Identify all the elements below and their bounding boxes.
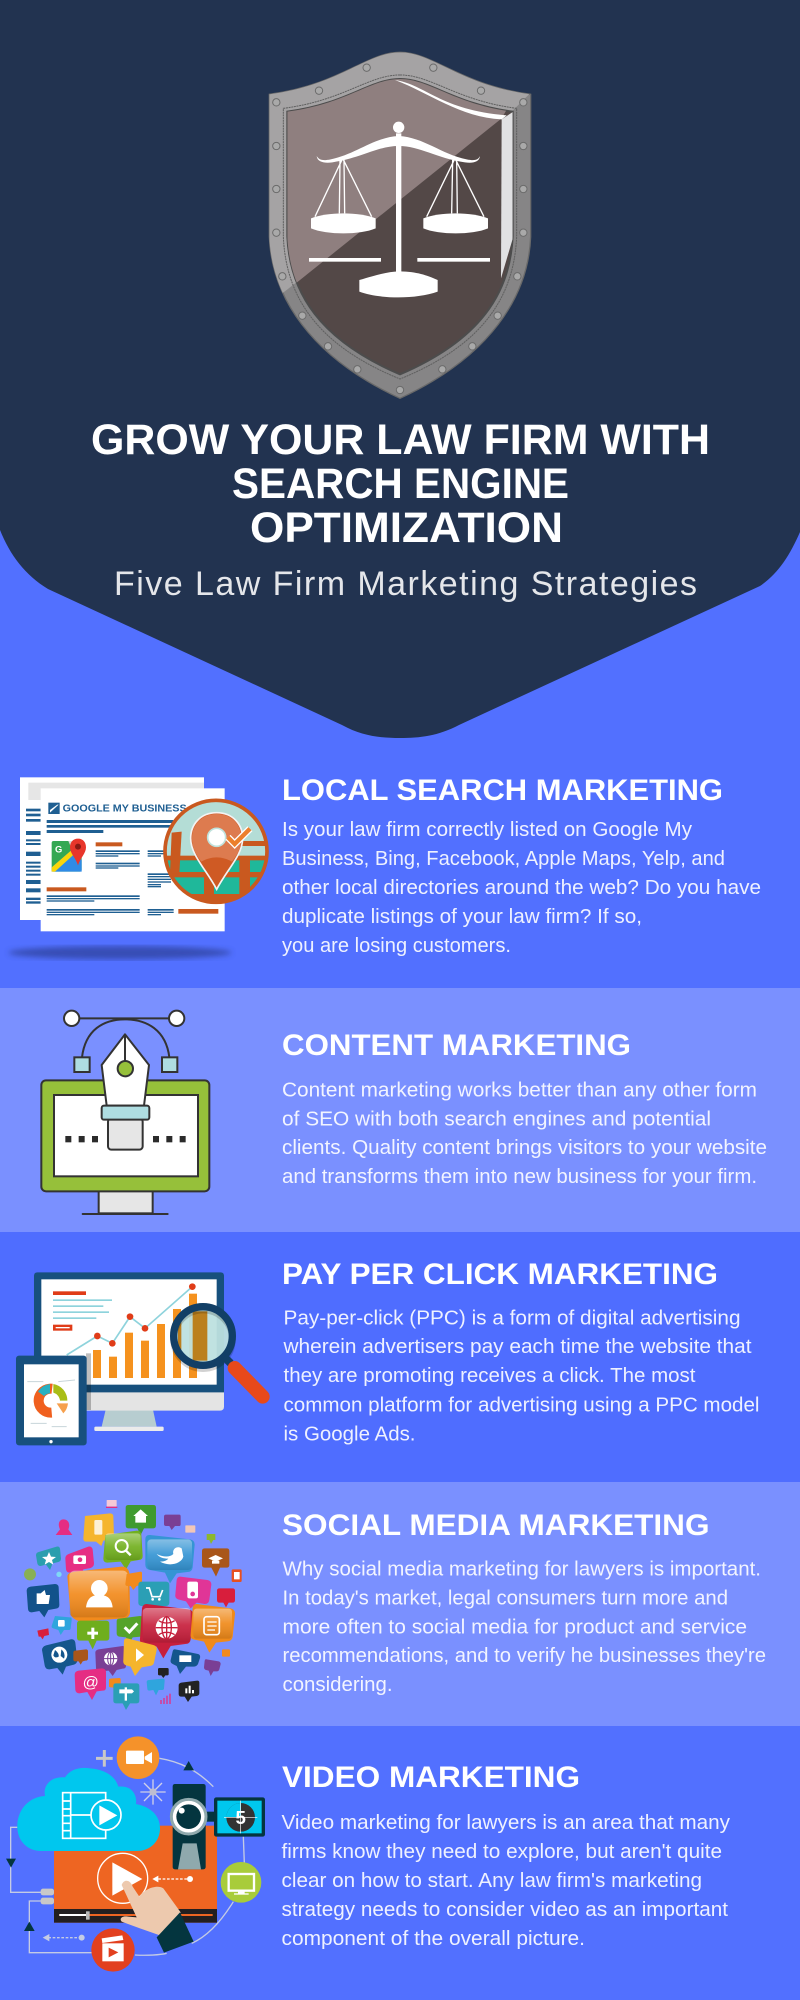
logo mark [48, 803, 60, 814]
text: local search description: other local directories around the web? Do you have [282, 877, 761, 899]
panel: pay per click band [0, 1232, 800, 1482]
panel: video marketing band [0, 1726, 800, 2000]
icon: pen tool on monitor [41, 1011, 209, 1214]
text: local search description: duplicate listings of your law firm? If so, [282, 906, 642, 928]
icon: scales of justice [309, 122, 490, 297]
text: pay per click description: they are promoting receives a click. The most [284, 1365, 696, 1387]
text: social media description [282, 1559, 766, 1696]
text: local search description: you are losing customers. [282, 935, 511, 957]
icon: google maps: G [55, 845, 62, 855]
text: content marketing description: clients. Quality content brings visitors to your website [282, 1137, 767, 1159]
icon: video marketing illustration [6, 1736, 265, 1972]
camera circle [117, 1736, 159, 1779]
title [91, 417, 710, 552]
text: video marketing description: clear on how to start. Any law firm's marketing [282, 1870, 702, 1892]
header panel [0, 0, 800, 738]
text: social media description: In today's market, legal consumers turn more and [282, 1588, 728, 1610]
monitor circle [221, 1862, 261, 1903]
icon: law shield with scales [268, 52, 532, 399]
dashed arrow [158, 1877, 189, 1881]
text: video marketing description: Video marketing for lawyers is an area that many [282, 1812, 730, 1834]
heading: social media marketing: SOCIAL MEDIA MARKETING [282, 1509, 710, 1542]
rivets [273, 64, 527, 394]
icon: social media bubble cluster [24, 1500, 242, 1710]
trend line [67, 1287, 192, 1355]
icon: video marketing illustration: 5 [235, 1807, 246, 1828]
title: OPTIMIZATION [250, 505, 563, 552]
text: content marketing description: of SEO with both search engines and potential [282, 1108, 711, 1130]
text: pay per click description: common platform for advertising using a PPC model [284, 1394, 760, 1416]
icon: social media bubble cluster: @ [83, 1674, 99, 1691]
text: local search description: Is your law firm correctly listed on Google My [282, 819, 692, 841]
text: pay per click description: wherein advertisers pay each time the website that [282, 1336, 752, 1358]
magnifier [174, 1307, 263, 1397]
text: pay per click description [282, 1308, 760, 1446]
title: GROW YOUR LAW FIRM WITH [91, 417, 710, 464]
text: video marketing description: strategy needs to consider video as an important [282, 1899, 728, 1921]
play button [98, 1853, 148, 1903]
icon: map pin badge [163, 800, 273, 907]
text: video marketing description: firms know they need to explore, but aren't quite [282, 1841, 722, 1863]
text: content marketing description: and transforms them into new business for your firm. [282, 1166, 757, 1188]
text: content marketing description: Content marketing works better than any other form [282, 1080, 757, 1102]
text: pay per click description: Pay-per-click (PPC) is a form of digital advertising [284, 1308, 740, 1330]
tablet [16, 1353, 91, 1445]
subtitle: Five Law Firm Marketing Strategies [114, 565, 697, 603]
icon: analytics monitor with magnifier and tablet [16, 1272, 263, 1445]
clapper circle [91, 1928, 135, 1972]
countdown screen [214, 1797, 265, 1837]
panel: content marketing band [0, 988, 800, 1232]
text: video marketing description [282, 1812, 730, 1950]
camera body [173, 1784, 206, 1869]
text: pay per click description: is Google Ads. [284, 1424, 416, 1446]
panel: social media band [0, 1482, 800, 1726]
heading: local search marketing: LOCAL SEARCH MARKETING [282, 774, 723, 807]
heading: content marketing: CONTENT MARKETING [282, 1029, 631, 1062]
text: video marketing description: component of the overall picture. [282, 1928, 585, 1950]
text: local search description: Business, Bing, Facebook, Apple Maps, Yelp, and [282, 848, 725, 870]
connector lines [11, 1758, 244, 1955]
text: social media description: Why social media marketing for lawyers is important. [282, 1559, 761, 1581]
icon: google my business listing [8, 777, 273, 959]
text: local search description [282, 819, 761, 957]
text: social media description: recommendations, and to verify he businesses they're [282, 1645, 766, 1667]
icon: google maps [52, 839, 86, 872]
video player [54, 1826, 217, 1923]
heading: video marketing: VIDEO MARKETING [282, 1761, 580, 1794]
hand [121, 1881, 181, 1937]
bars [93, 1294, 197, 1378]
sun [140, 1779, 166, 1805]
heading: pay per click marketing: PAY PER CLICK MARKETING [282, 1258, 718, 1291]
icon: google my business listing: GOOGLE MY BUSINESS [63, 804, 187, 815]
film strip and play [63, 1793, 121, 1838]
text: content marketing description [282, 1080, 767, 1188]
shadow [8, 946, 232, 959]
text: social media description: more often to social media for product and service [282, 1617, 747, 1639]
cloud [17, 1768, 160, 1851]
title: SEARCH ENGINE [232, 461, 569, 508]
text: social media description: considering. [282, 1674, 392, 1696]
